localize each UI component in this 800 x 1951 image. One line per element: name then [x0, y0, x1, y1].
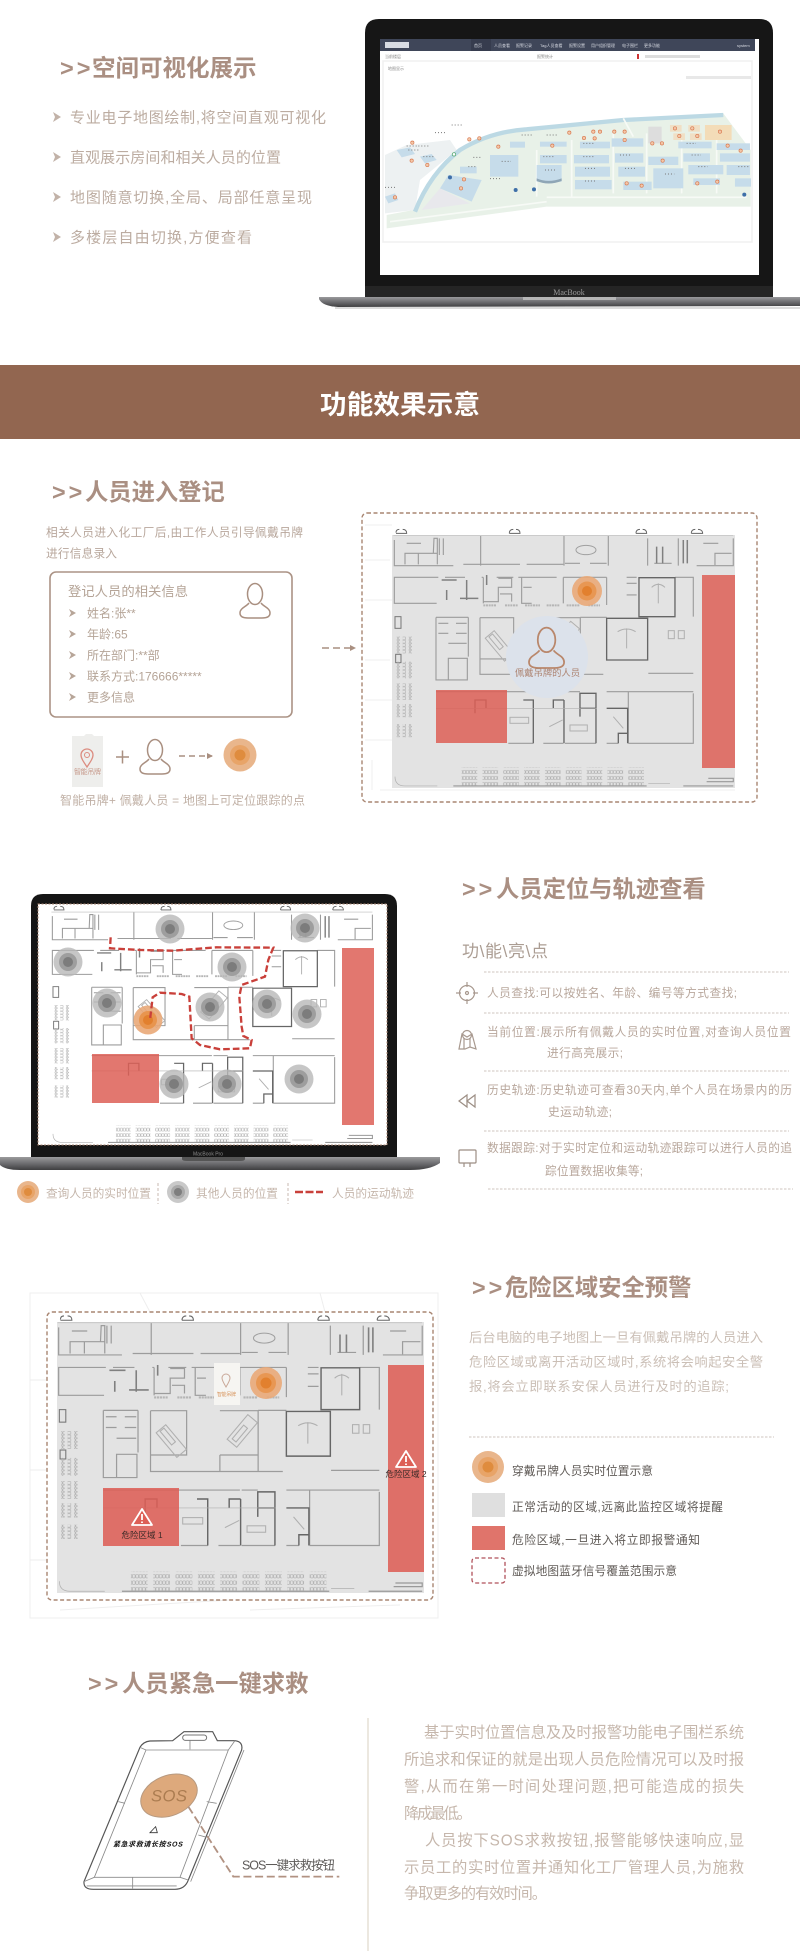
campus map — [385, 113, 751, 228]
description text: 报,将会立即联系安保人员进行及时的追踪; — [469, 1379, 729, 1394]
app nav bar: system — [737, 43, 750, 48]
heading: location and track: 人员定位与轨迹查看 — [496, 875, 706, 902]
illustration: SOS badge — [84, 1732, 339, 1889]
danger zones — [436, 575, 735, 768]
heading: location and track: >> — [462, 876, 495, 902]
orange queried person dot — [134, 1006, 162, 1034]
legend: 人员的运动轨迹 — [332, 1186, 414, 1200]
app nav bar: 报警设置 — [569, 42, 585, 48]
icon: smart badge — [72, 734, 103, 787]
feature row: data tracking — [459, 1141, 792, 1178]
intro text: 相关人员进入化工厂后,由工作人员引导佩戴吊牌 — [46, 525, 303, 539]
icon: MacBook with campus map: MacBook — [553, 288, 585, 297]
callout: badge wearer — [506, 616, 588, 698]
panel: location and track — [0, 875, 793, 1204]
tiny building labels — [385, 125, 748, 187]
legend: zones — [472, 1451, 723, 1583]
bullet list: 多楼层自由切换,方便查看 — [70, 230, 252, 246]
icon: MacBook with campus map: 报警统计 — [537, 53, 553, 59]
feature row: current location: 当前位置:展示所有佩戴人员的实时位置,对查询人员位置 — [487, 1025, 791, 1039]
callout: badge wearer: 佩戴吊牌的人员 — [515, 667, 580, 678]
feature row: history track: 史运动轨迹; — [548, 1105, 612, 1119]
heading: space visualisation: 空间可视化展示 — [92, 55, 256, 81]
description text: 降成最低。 — [404, 1806, 472, 1822]
heading: emergency SOS: >> — [88, 1670, 121, 1696]
icon: rewind — [459, 1095, 475, 1107]
info card: 年龄:65 — [87, 628, 128, 642]
floor plan map 1 — [362, 513, 757, 802]
description text: 示员工的实时位置并通知化工厂管理人员,为施救 — [404, 1860, 744, 1876]
arrow — [179, 753, 213, 759]
app nav bar: 更多功能 — [644, 42, 660, 48]
icon: location dot — [224, 738, 256, 772]
danger zones — [92, 948, 374, 1125]
description text: 危险区域或离开活动区域时,系统将会响起安全警 — [469, 1354, 763, 1370]
legend: 查询人员的实时位置 — [46, 1186, 151, 1200]
icon: smart badge: 智能吊牌 — [74, 767, 101, 776]
info card: 更多信息 — [87, 690, 135, 704]
danger zone 1 — [103, 1488, 179, 1546]
feature row: data tracking: 踪位置数据收集等; — [545, 1164, 643, 1178]
bullet list: 专业电子地图绘制,将空间直观可视化 — [70, 110, 326, 126]
callout: smart badge: 智能吊牌 — [217, 1391, 236, 1398]
feature row: person search: 人员查找:可以按姓名、年龄、编号等方式查找; — [487, 986, 737, 1000]
feature row: history track: 历史轨迹:历史轨迹可查看30天内,单个人员在场景内的历 — [487, 1083, 792, 1097]
icon: map person — [459, 1030, 476, 1049]
description text — [404, 1724, 744, 1902]
feature row: person search — [456, 982, 737, 1004]
description text: 基于实时位置信息及及时报警功能电子围栏系统 — [424, 1724, 744, 1742]
heading: personnel registration: >> — [52, 479, 85, 505]
danger zone 2: 危险区域 2 — [385, 1469, 427, 1479]
location markers — [393, 127, 742, 199]
feature row: history track — [459, 1083, 792, 1119]
subheading: feature highlights: 功\能\亮\点 — [462, 942, 548, 961]
icon: person — [140, 740, 170, 774]
info card: 所在部门:**部 — [87, 648, 160, 662]
feature row: current location: 进行高亮展示; — [547, 1046, 623, 1060]
description text: 争取更多的有效时间。 — [404, 1884, 547, 1902]
description text: 后台电脑的电子地图上一旦有佩戴吊牌的人员进入 — [469, 1329, 763, 1345]
other personnel dots — [54, 914, 322, 1098]
info card: 姓名:张** — [87, 606, 136, 620]
app nav bar: 报警记录 — [516, 42, 532, 48]
icon: target — [456, 982, 478, 1004]
orange location dot — [250, 1367, 282, 1399]
description text: 人员按下SOS求救按钮,报警能够快速响应,显 — [425, 1832, 744, 1850]
panel: space visualisation — [53, 19, 800, 309]
description text — [469, 1329, 763, 1394]
icon: MacBook Pro with track map — [0, 894, 440, 1170]
arrow to map — [322, 645, 356, 651]
icon: person — [240, 584, 270, 618]
icon: monitor — [459, 1150, 476, 1167]
SOS button: SOS — [151, 1787, 187, 1806]
app nav bar — [380, 39, 755, 51]
description text: 警,从而在第一时间处理问题,把可能造成的损失 — [404, 1778, 744, 1796]
icon: MacBook with campus map — [319, 19, 800, 309]
intro text — [46, 525, 303, 560]
SOS button — [134, 1766, 204, 1825]
heading: personnel registration: 人员进入登记 — [85, 479, 225, 505]
caption: 智能吊牌+ 佩戴人员 = 地图上可定位跟踪的点 — [60, 792, 305, 807]
bullet list: 直观展示房间和相关人员的位置 — [70, 150, 281, 166]
icon: MacBook Pro with track map: MacBook Pro — [193, 1152, 223, 1158]
legend: zones: 危险区域,一旦进入将立即报警通知 — [512, 1533, 700, 1547]
heading: danger zone warning: >> — [472, 1274, 505, 1300]
info card: 登记人员的相关信息 — [68, 583, 188, 599]
app nav bar: Tag人员查看 — [540, 42, 562, 48]
app nav bar: 电子围栏 — [622, 42, 638, 48]
intro text: 进行信息录入 — [46, 546, 117, 560]
legend: zones: 正常活动的区域,远离此监控区域将提醒 — [512, 1500, 723, 1514]
movement track — [110, 937, 273, 1049]
feature row: data tracking: 数据跟踪:对于实时定位和运动轨迹跟踪可以进行人员的追 — [487, 1141, 792, 1155]
app nav bar: 用户组织管理 — [591, 42, 615, 48]
equation: badge plus person equals dot — [60, 734, 305, 807]
app nav bar: 首页 — [474, 42, 482, 48]
floor plan map 2 — [51, 906, 372, 1142]
banner: feature effects: 功能效果示意 — [320, 390, 480, 420]
heading: danger zone warning: 危险区域安全预警 — [505, 1274, 691, 1300]
legend: zones: 穿戴吊牌人员实时位置示意 — [512, 1464, 653, 1478]
panel: emergency SOS — [84, 1670, 744, 1951]
danger zone 1: 危险区域 1 — [121, 1530, 163, 1540]
leader line — [188, 1807, 339, 1877]
legend — [17, 1181, 414, 1204]
orange location dot — [572, 576, 602, 606]
icon: MacBook with campus map: 当前楼层 — [385, 53, 401, 59]
banner: feature effects — [0, 365, 800, 439]
floor plan map 3 — [30, 1293, 438, 1618]
bullet list — [53, 110, 326, 246]
label: SOS button: SOS一键求救按钮 — [242, 1858, 335, 1872]
info card: 联系方式:176666***** — [87, 668, 202, 684]
info card — [50, 572, 292, 717]
panel: personnel registration — [46, 479, 757, 807]
bullet list: 地图随意切换,全局、局部任意呈现 — [70, 188, 312, 206]
heading: emergency SOS: 人员紧急一键求救 — [122, 1670, 308, 1696]
illustration: SOS badge: 紧急求救请长按SOS — [112, 1840, 184, 1849]
icon: MacBook with campus map: 地图显示 — [388, 65, 404, 71]
panel: danger zone warning — [30, 1274, 774, 1618]
heading: space visualisation: >> — [60, 55, 93, 81]
app nav bar: 人员查看 — [494, 42, 510, 48]
danger zone 2 — [385, 1365, 427, 1572]
feature row: current location — [459, 1025, 791, 1060]
legend: zones: 虚拟地图蓝牙信号覆盖范围示意 — [512, 1564, 677, 1578]
description text: 所追求和保证的就是出现人员危险情况可以及时报 — [404, 1752, 744, 1768]
callout: smart badge — [214, 1363, 240, 1405]
legend: 其他人员的位置 — [196, 1186, 278, 1200]
